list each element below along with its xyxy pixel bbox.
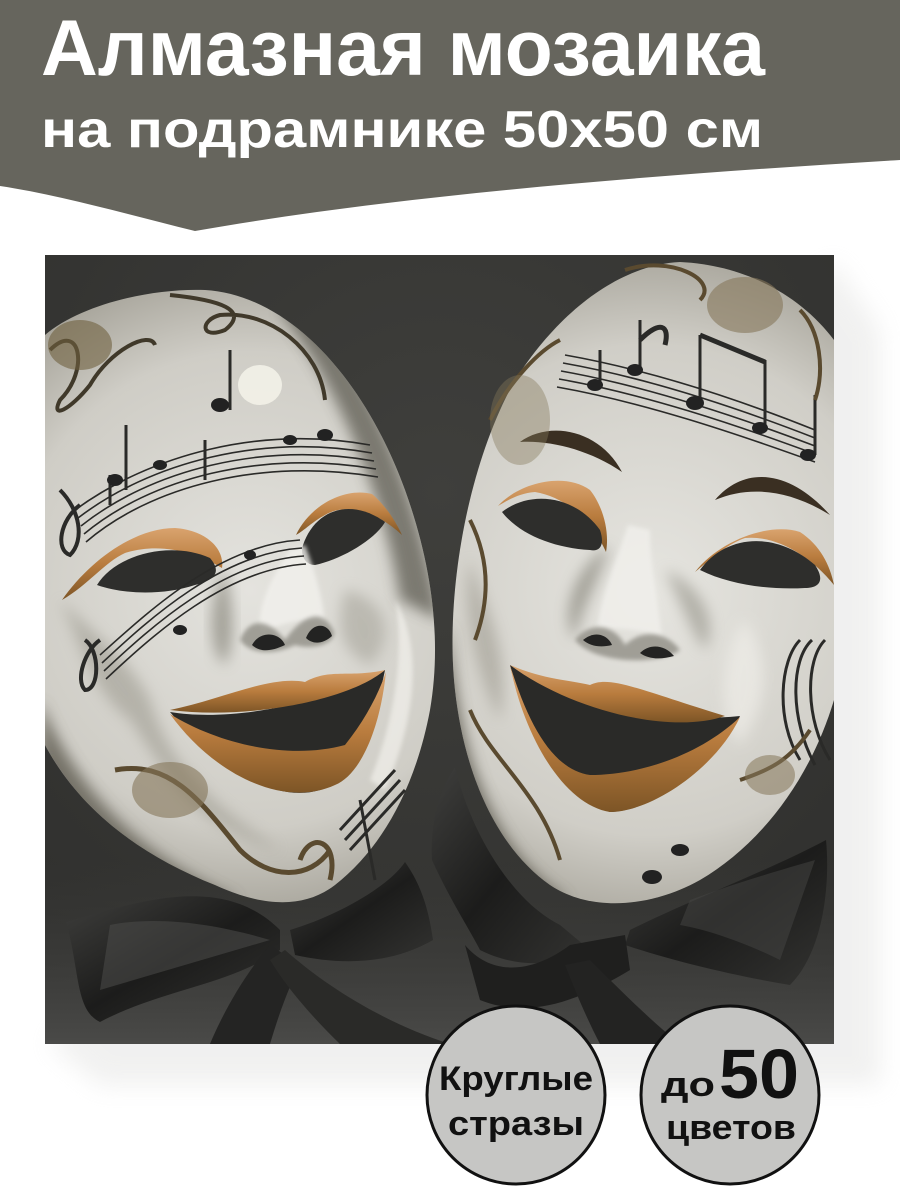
left mask <box>40 290 440 902</box>
ribbon: left bow <box>66 862 450 1044</box>
right decorative gilding <box>707 277 783 333</box>
right mouth <box>510 665 740 812</box>
left eyes <box>97 550 216 592</box>
right music staff <box>470 265 830 860</box>
right nose <box>598 525 662 638</box>
left decorative gilding <box>48 320 112 370</box>
badge: up to 50 colours: до <box>661 1066 715 1104</box>
left mask shading <box>40 300 440 900</box>
left nose <box>260 545 325 632</box>
right eye lashes <box>498 481 607 552</box>
canvas shadow <box>50 262 880 1085</box>
badge: round rhinestones: стразы <box>448 1105 584 1143</box>
left music staff <box>50 295 405 880</box>
right eyebrows <box>520 431 622 472</box>
subtitle: на подрамнике 50х50 см <box>41 101 763 159</box>
right mask shading <box>440 545 763 900</box>
right eyes <box>502 499 602 550</box>
badge: up to 50 colours: 50 <box>719 1035 799 1113</box>
badge: round rhinestones: Круглые <box>439 1060 593 1098</box>
title: Алмазная мозаика <box>41 3 766 92</box>
ribbon: right bow <box>434 814 827 1044</box>
badge: up to 50 colours: цветов <box>666 1109 796 1147</box>
right mask <box>440 262 834 903</box>
badge: up to 50 colours <box>641 1006 819 1184</box>
badge: round rhinestones <box>427 1006 605 1184</box>
left eye lashes <box>62 528 222 600</box>
left mouth <box>170 670 385 793</box>
header banner <box>0 0 900 231</box>
picture: theatre masks <box>40 255 834 1044</box>
